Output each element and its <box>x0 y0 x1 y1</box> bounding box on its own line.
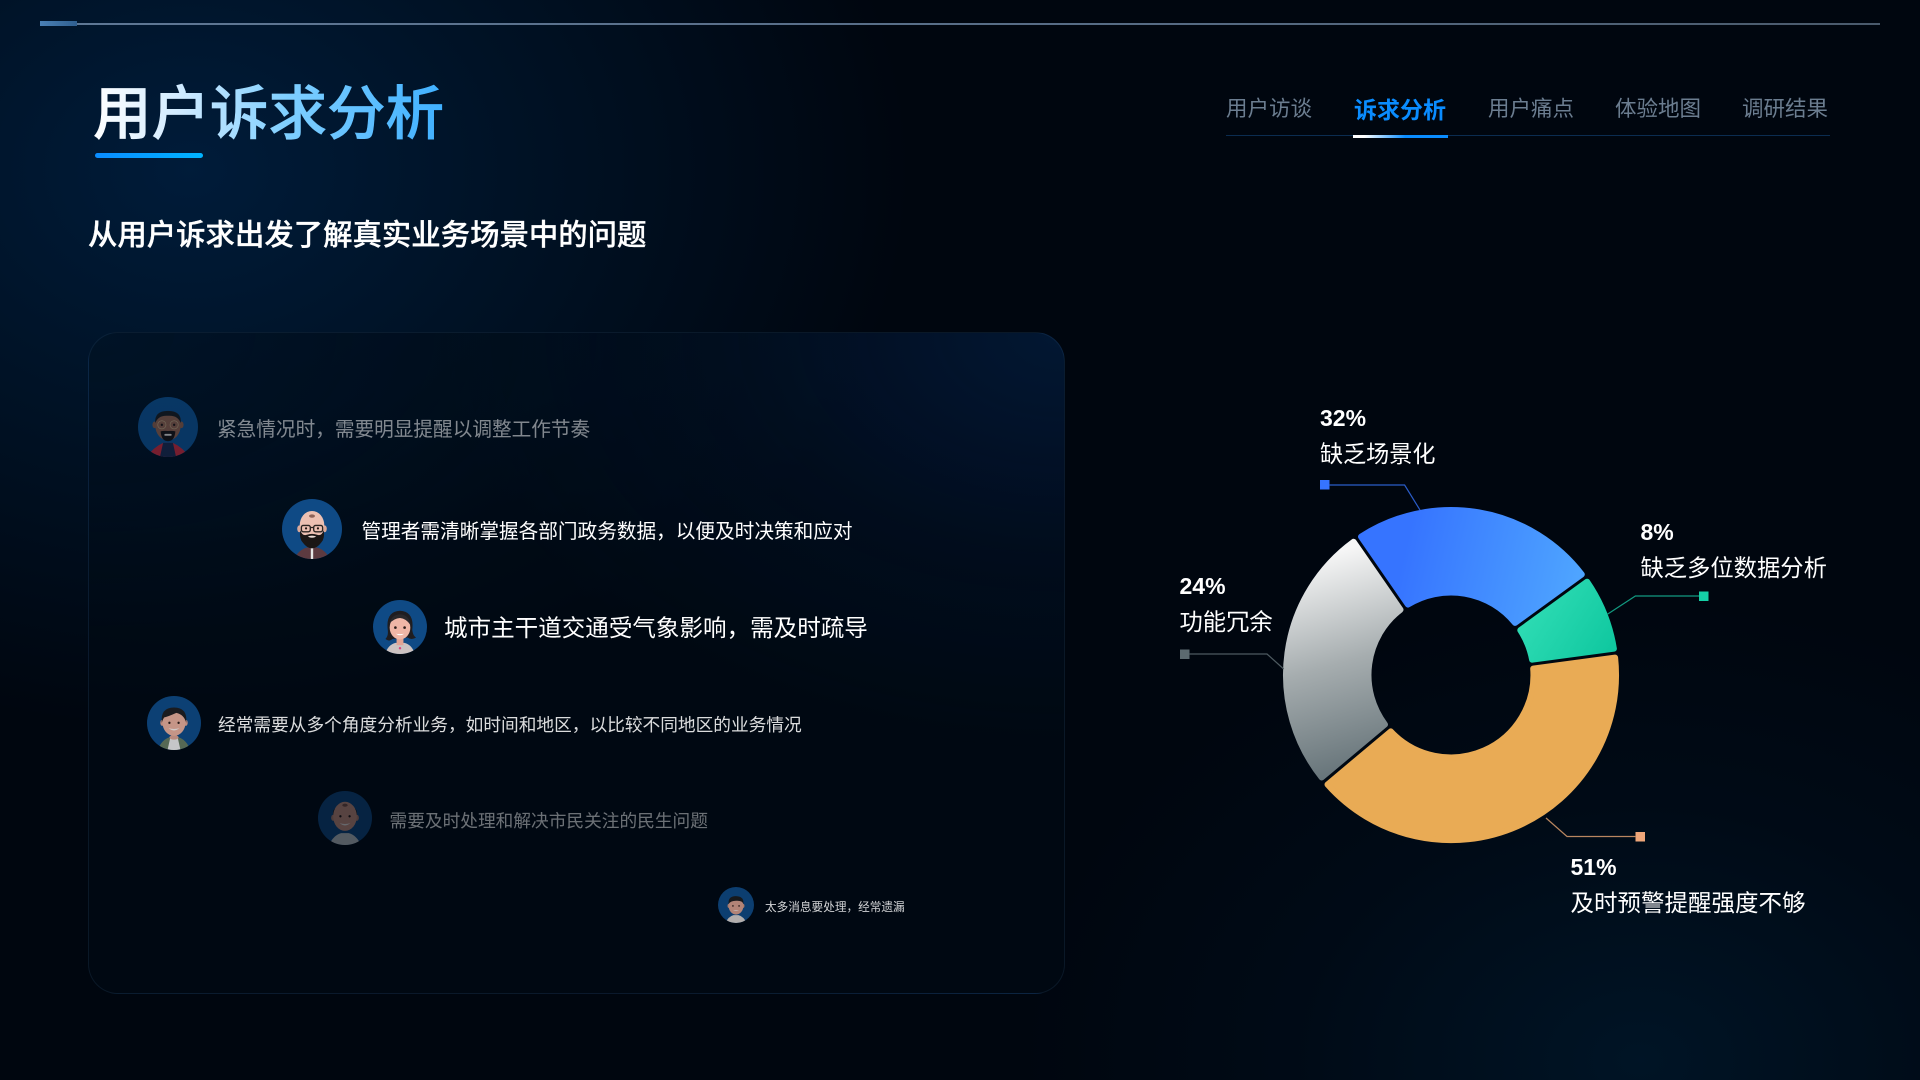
quote text: 需要及时处理和解决市民关注的民生问题 <box>390 811 708 831</box>
callout: 32% 缺乏场景化: 32% <box>1320 405 1366 431</box>
tab: 用户访谈: 用户访谈 <box>1226 97 1312 121</box>
segment: 缺乏场景化 <box>1361 510 1582 623</box>
title: 用户诉求分析 <box>93 82 444 147</box>
callout: 8% 缺乏多位数据分析 <box>1608 519 1827 614</box>
avatar: young man <box>718 887 754 923</box>
tab: 用户痛点: 用户痛点 <box>1488 97 1574 121</box>
callout: 24% 功能冗余 <box>1180 573 1284 669</box>
avatar: man with side-parted hair <box>147 696 201 750</box>
tab: 调研结果: 调研结果 <box>1742 97 1828 121</box>
subtitle: 从用户诉求出发了解真实业务场景中的问题 <box>88 219 646 252</box>
quote row 3 <box>373 600 868 654</box>
callout: 32% 缺乏场景化: 缺乏场景化 <box>1320 441 1435 467</box>
navigation tabs <box>1226 97 1830 138</box>
quote text: 管理者需清晰掌握各部门政务数据，以便及时决策和应对 <box>362 521 853 543</box>
quote row 5 <box>318 791 708 845</box>
callout: 24% 功能冗余: 24% <box>1180 573 1226 599</box>
callout: 8% 缺乏多位数据分析: 8% <box>1640 519 1674 545</box>
callout: 51% 及时预警提醒强度不够: 及时预警提醒强度不够 <box>1570 890 1806 916</box>
avatar: man with beard <box>138 397 198 457</box>
quote row 6 <box>718 887 905 923</box>
quote text: 太多消息要处理，经常遗漏 <box>765 901 905 914</box>
quote text: 经常需要从多个角度分析业务，如时间和地区，以比较不同地区的业务情况 <box>218 715 802 735</box>
quote text: 城市主干道交通受气象影响，需及时疏导 <box>444 615 868 641</box>
callout: 32% 缺乏场景化 <box>1320 405 1435 510</box>
quote row 2 <box>282 499 853 559</box>
avatar: bald man with glasses <box>282 499 342 559</box>
quote row 4 <box>147 696 802 750</box>
panel: user quotes <box>88 332 1065 994</box>
tab baseline <box>1226 135 1830 136</box>
quote text: 紧急情况时，需要明显提醒以调整工作节奏 <box>217 419 590 441</box>
callout: 8% 缺乏多位数据分析: 缺乏多位数据分析 <box>1640 555 1827 581</box>
callout: 51% 及时预警提醒强度不够 <box>1546 818 1806 916</box>
active tab underline <box>1353 135 1448 138</box>
callout: 51% 及时预警提醒强度不够: 51% <box>1570 854 1617 880</box>
segment: 功能冗余 <box>1286 542 1400 778</box>
tab: 诉求分析 active: 诉求分析 <box>1354 97 1446 123</box>
avatar: woman with dark hair <box>373 600 427 654</box>
avatar: balding man <box>318 791 372 845</box>
segment: 缺乏多位数据分析 <box>1520 582 1614 660</box>
tab: 体验地图: 体验地图 <box>1615 97 1701 121</box>
top rule <box>40 21 1880 26</box>
title underline <box>95 153 203 158</box>
quote row 1 <box>138 397 590 457</box>
segment: 及时预警提醒强度不够 <box>1328 658 1616 840</box>
callout: 24% 功能冗余: 功能冗余 <box>1180 609 1273 635</box>
